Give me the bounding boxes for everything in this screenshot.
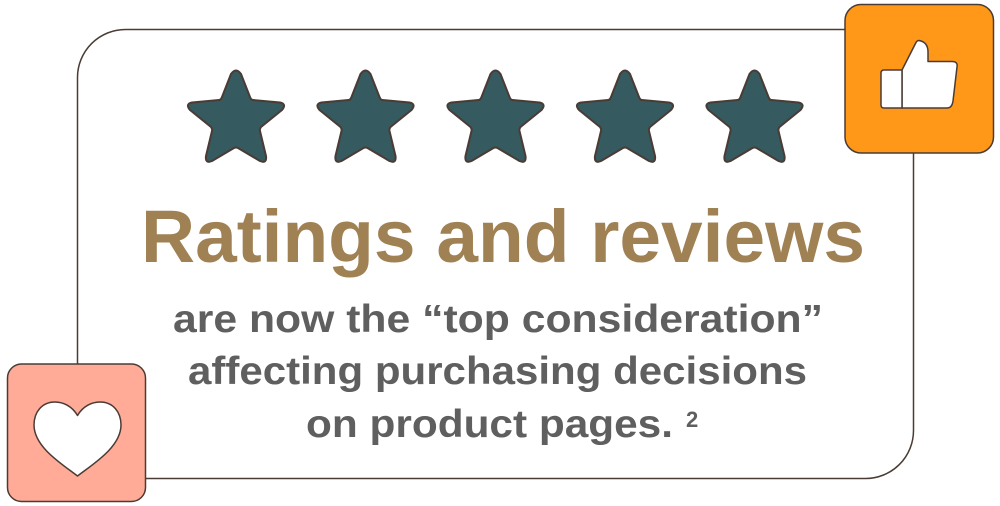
icon: star 3 bbox=[447, 70, 544, 162]
text block: description: 2 bbox=[686, 407, 698, 432]
heading: Ratings and reviews bbox=[141, 195, 865, 278]
icon: star 2 bbox=[317, 70, 414, 162]
icon: thumbs up badge bbox=[845, 4, 994, 153]
icon: star 5 bbox=[706, 70, 803, 162]
text block: description: affecting purchasing decisions bbox=[188, 350, 807, 393]
icon: star 1 bbox=[188, 70, 284, 162]
panel: rounded frame bbox=[78, 30, 914, 478]
text block: description: on product pages. bbox=[306, 403, 673, 446]
icon: heart badge bbox=[8, 364, 146, 502]
icon: star 4 bbox=[577, 70, 673, 162]
text block: description: are now the “top consideration” bbox=[173, 298, 823, 341]
text block: description bbox=[173, 298, 823, 446]
five star rating bbox=[188, 70, 803, 162]
